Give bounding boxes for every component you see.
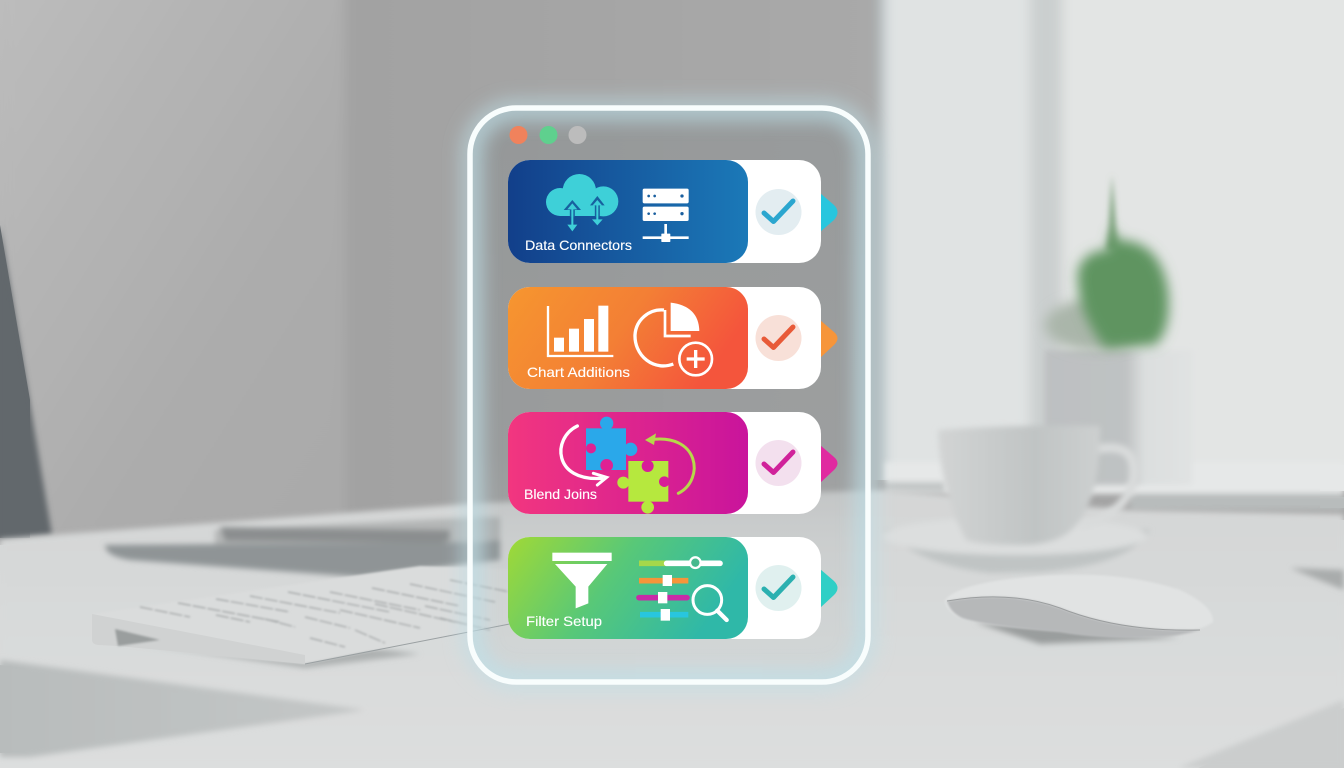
- icon: server network: [643, 189, 689, 242]
- row: Filter Setup: [508, 537, 838, 639]
- mouse: [945, 575, 1213, 644]
- icon: puzzle pieces with arrows: [561, 417, 694, 514]
- icon: cloud upload download: [546, 174, 618, 231]
- label: Blend Joins: [524, 486, 597, 502]
- panel glass fill: [470, 108, 868, 682]
- saucer: [883, 517, 1150, 573]
- panel inner edge glow: [472, 110, 866, 632]
- coffee cup: [938, 426, 1134, 545]
- dark wedge at left edge: [0, 225, 52, 540]
- row: Blend Joins: [508, 412, 838, 514]
- wall: [0, 0, 1344, 560]
- row: Data Connectors: [508, 160, 838, 263]
- icon: sliders and magnifier: [639, 557, 727, 621]
- window dots: [510, 126, 586, 144]
- panel white border: [470, 108, 868, 682]
- icon: funnel: [552, 553, 612, 608]
- plant: [1045, 175, 1169, 351]
- label: Data Connectors: [525, 237, 632, 253]
- side tab: [820, 320, 838, 358]
- tablet stack: [105, 517, 500, 577]
- side tab: [820, 569, 838, 608]
- row: Chart Additions: [508, 287, 838, 389]
- white card: [508, 287, 821, 389]
- check icon: [756, 315, 802, 361]
- white card: [508, 160, 821, 263]
- colored band: [508, 537, 748, 639]
- white card: [508, 412, 821, 514]
- check icon: [756, 189, 802, 235]
- side tab: [820, 193, 838, 232]
- object at right edge: [1290, 568, 1344, 590]
- side tab: [820, 445, 838, 483]
- check icon: [756, 440, 802, 486]
- window sill: [885, 462, 1344, 510]
- colored band: [508, 287, 748, 389]
- bottom-left slab: [0, 660, 365, 757]
- desk corner bottom right: [1178, 700, 1344, 768]
- icon: bar chart: [548, 306, 613, 356]
- plant pot: [1045, 350, 1192, 485]
- icon: pie chart with plus: [635, 303, 712, 375]
- desk surface: [0, 490, 1344, 768]
- label: Filter Setup: [526, 613, 602, 629]
- check icon: [756, 565, 802, 611]
- keyboard: [92, 566, 530, 668]
- glass panel: [470, 108, 868, 682]
- label: Chart Additions: [527, 364, 630, 380]
- colored band: [508, 160, 748, 263]
- panel outer glow: [470, 108, 868, 682]
- white card: [508, 537, 821, 639]
- colored band: [508, 412, 748, 514]
